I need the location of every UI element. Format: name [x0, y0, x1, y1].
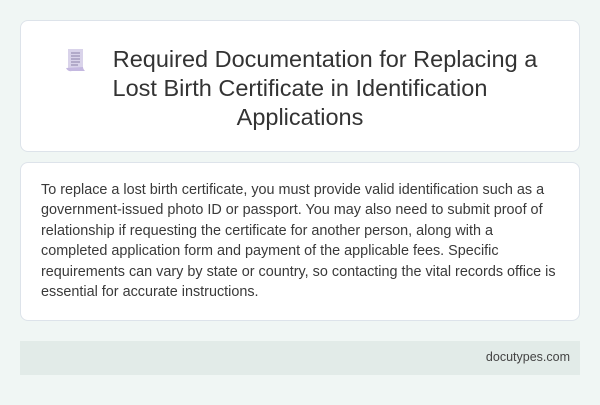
icon: document [66, 49, 85, 72]
title: Required Documentation for Replacing a [113, 46, 537, 72]
title: Applications [237, 104, 363, 130]
panel: description [20, 162, 580, 321]
footer: docutypes.com [486, 350, 570, 364]
title [113, 46, 538, 130]
title: Lost Birth Certificate in Identification [113, 75, 487, 101]
title card [20, 20, 580, 152]
text block: To replace a lost birth certificate, you must provide valid identification such as a government-issued photo ID or passport. You may also need to submit proof of relationship if requesting the certificate for another person, along with a completed application form and payment of the applicable fees. Specific requirements can vary by state or country, so contacting the vital records office is essential for accurate instructions. [41, 182, 556, 300]
footer [20, 341, 580, 375]
